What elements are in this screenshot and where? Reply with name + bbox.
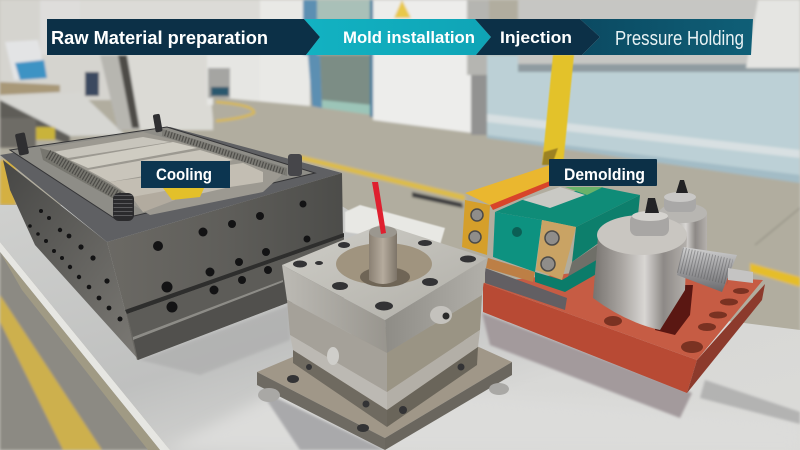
step: Injection: Injection — [500, 28, 572, 47]
side stamp — [327, 347, 339, 365]
label: Demolding — [549, 159, 657, 186]
rear cylinder — [660, 213, 707, 258]
label: Demolding: Demolding — [564, 166, 645, 184]
large steel mold (cooling) — [0, 114, 344, 360]
block green — [495, 187, 640, 227]
cavity — [336, 243, 432, 285]
front cylinder — [593, 236, 687, 330]
base recess — [655, 285, 693, 335]
label: Cooling: Cooling — [156, 166, 212, 184]
side port — [430, 306, 452, 324]
step: Mold installation: Mold installation — [343, 28, 475, 47]
mold holes — [287, 240, 476, 432]
cooling comb left — [40, 148, 132, 198]
step: Raw Material preparation — [47, 19, 320, 55]
step: Injection — [475, 19, 600, 55]
feet — [258, 388, 280, 402]
mold top — [282, 224, 487, 320]
mold left face — [3, 160, 137, 358]
step: Pressure Holding — [580, 19, 753, 55]
mold top plate — [0, 127, 342, 242]
step: Raw Material preparation: Raw Material preparation — [51, 27, 268, 48]
yellow measuring post — [542, 55, 574, 165]
base holes — [604, 288, 749, 353]
mold holes — [28, 200, 310, 322]
mold sides — [282, 265, 387, 353]
white paper on table — [345, 205, 445, 245]
process banner — [47, 19, 753, 55]
label: Cooling — [141, 161, 230, 188]
base plate — [257, 325, 512, 438]
step: Mold installation — [304, 19, 491, 55]
mold right face — [107, 173, 344, 360]
steel cylinders — [593, 180, 753, 330]
block yellow — [465, 165, 552, 205]
yellow and green press block — [462, 165, 640, 310]
cooling bars — [40, 132, 287, 215]
block bolts — [469, 209, 559, 271]
step: Pressure Holding: Pressure Holding — [615, 28, 744, 50]
block copper and slab — [486, 258, 535, 282]
red-orange base — [483, 270, 765, 393]
spigot — [369, 232, 397, 284]
small steel mold — [257, 182, 512, 450]
table top — [0, 205, 800, 450]
cooling comb back — [162, 129, 287, 176]
bolts — [15, 114, 302, 221]
red rod — [372, 182, 386, 234]
threaded fitting — [677, 247, 753, 292]
block brass plate — [536, 220, 576, 280]
